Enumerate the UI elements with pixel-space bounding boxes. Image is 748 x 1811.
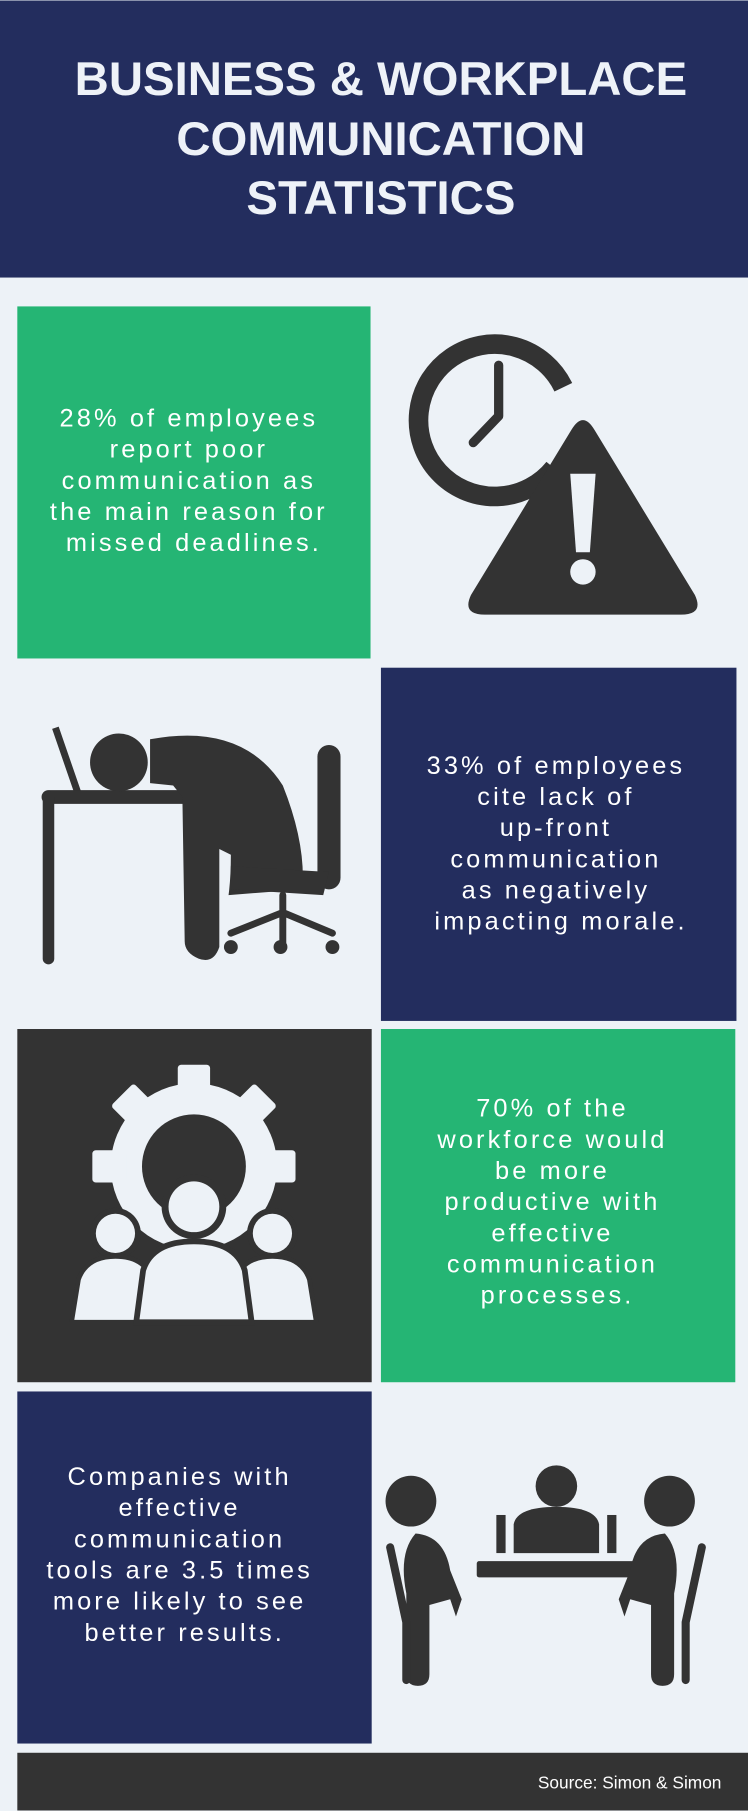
panel: stat 1: communication as xyxy=(62,467,316,495)
panel: stat 3: productive with xyxy=(444,1188,660,1216)
panel: stat 4 xyxy=(17,1391,372,1744)
panel: stat 1 xyxy=(17,306,371,658)
panel: team icon xyxy=(17,1029,372,1382)
title: BUSINESS & WORKPLACE xyxy=(75,53,687,106)
panel: stat 3: be more xyxy=(495,1157,610,1185)
panel: stat 3 xyxy=(381,1029,735,1382)
panel: stat 2: cite lack of xyxy=(477,783,635,811)
panel: stat 2: 33% of employees xyxy=(427,752,685,780)
panel: stat 1: the main reason for xyxy=(50,498,328,526)
header xyxy=(0,1,748,278)
panel: stat 1: report poor xyxy=(110,436,268,464)
panel: stat 4: more likely to see xyxy=(53,1588,306,1616)
panel: stat 3: 70% of the xyxy=(476,1095,629,1123)
icon: exhausted worker at desk xyxy=(48,728,339,960)
panel: stat 4: Companies with xyxy=(68,1463,292,1491)
title line 2: COMMUNICATION xyxy=(176,113,585,166)
panel: stat 2: up-front xyxy=(500,814,612,842)
panel: stat 2: communication xyxy=(450,845,662,873)
title line 3: STATISTICS xyxy=(246,172,515,225)
panel: stat 3: communication xyxy=(447,1251,658,1279)
panel: stat 3: processes. xyxy=(481,1282,634,1310)
icon: clock and warning xyxy=(418,344,698,615)
footer xyxy=(17,1753,748,1810)
panel: stat 1: 28% of employees xyxy=(60,404,318,432)
panel: stat 4: better results. xyxy=(84,1619,285,1647)
panel: stat 4: communication xyxy=(74,1525,285,1553)
source text: Source: Simon & Simon xyxy=(538,1773,721,1793)
icon: gear with people xyxy=(72,1065,316,1322)
panel: stat 4: tools are 3.5 times xyxy=(46,1556,313,1584)
icon: meeting table xyxy=(386,1465,702,1686)
panel: stat 2: as negatively xyxy=(462,877,650,905)
panel: stat 2 xyxy=(381,668,736,1021)
panel: stat 4: effective xyxy=(119,1494,241,1522)
panel: stat 2: impacting morale. xyxy=(434,908,688,936)
panel: stat 3: workforce would xyxy=(436,1126,667,1154)
panel: stat 1: missed deadlines. xyxy=(66,529,322,557)
panel: stat 3: effective xyxy=(491,1219,613,1247)
